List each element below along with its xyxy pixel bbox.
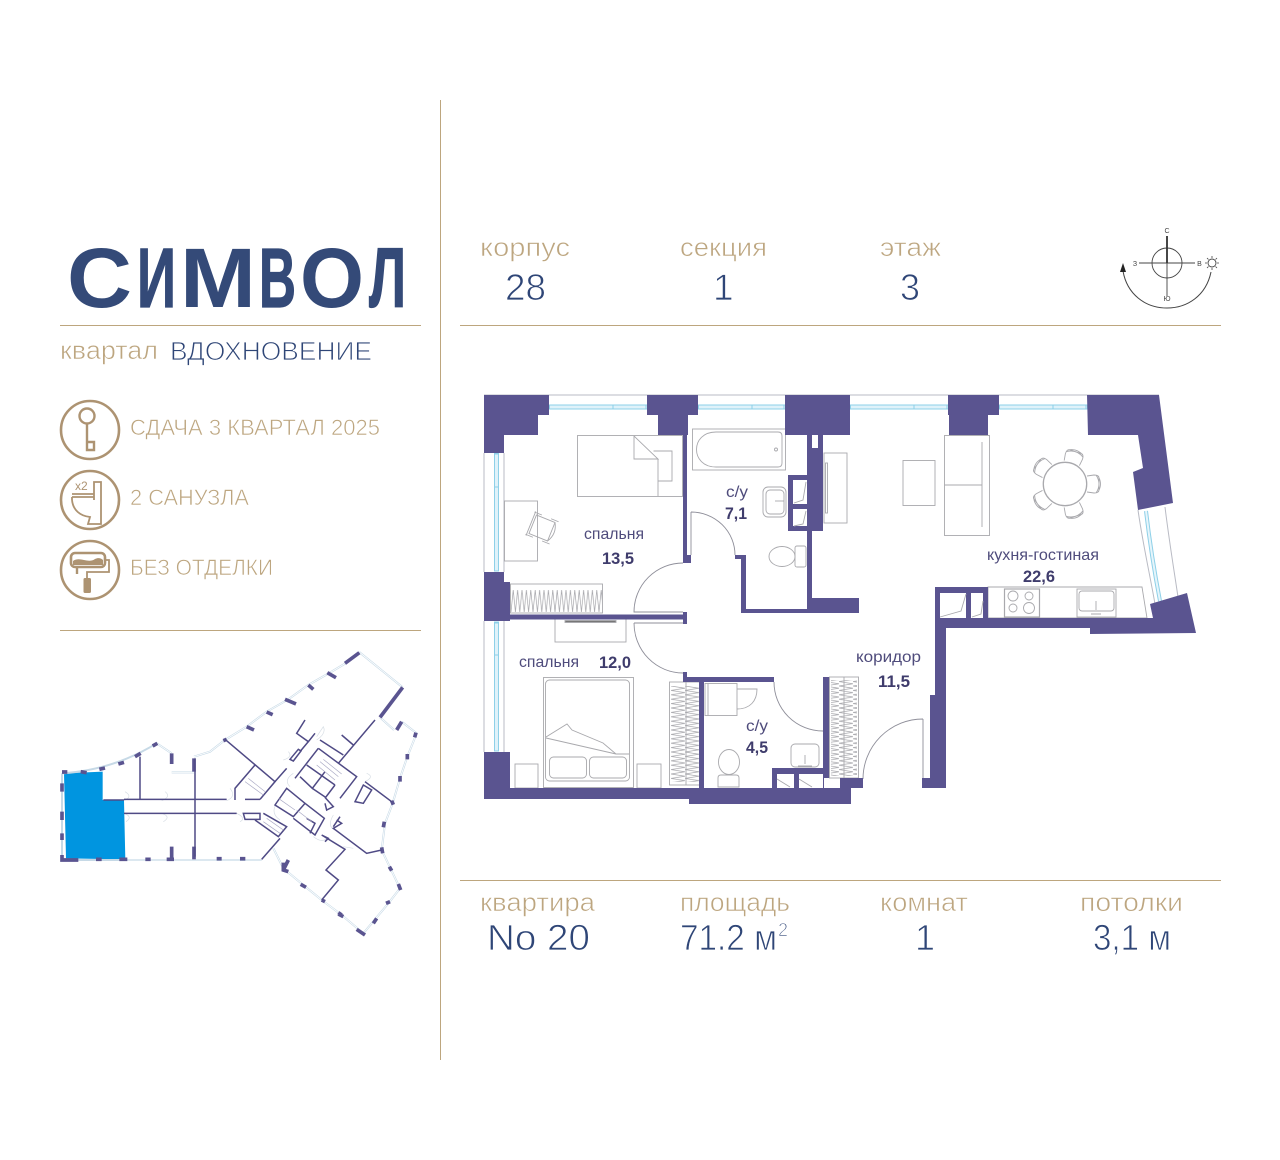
key plan of the floor [62,653,417,935]
floor plan [484,395,1196,804]
room label: bedroom 2: 12,0 [599,654,631,672]
logo: Л [369,231,406,325]
logo: М [180,231,256,325]
outer piers [62,653,416,935]
rooms: 1 [915,917,935,958]
icon: toilet x2 [61,471,119,529]
shaft door marks [777,482,983,787]
feature: finish: БЕЗ ОТДЕЛКИ [130,555,273,580]
icon: compass: З [1133,261,1137,268]
logo: В [259,231,296,325]
district name: квартал [60,335,158,365]
room label: corridor [856,649,921,691]
logo [67,231,406,325]
district name: ВДОХНОВЕНИЕ [170,336,372,366]
floor [880,232,942,308]
ceiling height: потолки [1080,887,1183,917]
furniture: bathroom 2 and hallway [705,677,858,787]
apartment number [480,887,596,958]
logo: О [300,231,364,325]
outer contour and windows [484,395,1178,752]
room label: bathroom 1: с/у [726,484,748,501]
room label: bedroom 1: спальня [584,526,644,543]
room label: bathroom 2: 4,5 [746,739,768,757]
room label: corridor: коридор [856,649,921,666]
section: секция [680,232,767,262]
icon: paint roller [61,541,119,599]
furniture: living room [824,436,1100,536]
icon: compass: В [1197,261,1202,268]
furniture: bedroom 2 [515,619,700,788]
furniture: bathroom 1 [692,429,806,567]
section [680,232,767,308]
header info [480,232,942,308]
rooms: комнат [880,887,968,917]
room label: bedroom 2: спальня [519,654,579,671]
room label: bathroom 1: 7,1 [725,505,747,523]
area: площадь [680,887,790,917]
interior walls [103,757,237,857]
icon: compass: Ю [1163,296,1171,303]
room label: bedroom 1 [584,526,644,568]
feature: bathrooms: 2 САНУЗЛА [130,485,249,510]
room label: bathroom 1 [725,484,748,523]
room label: kitchen-living: кухня-гостиная [987,547,1099,564]
building [480,232,570,308]
floor: 3 [900,267,920,308]
room label: bedroom 1: 13,5 [602,550,634,568]
pale door swings [124,727,370,848]
icon: compass: С [1164,228,1170,235]
area [680,887,790,958]
icon: key [61,401,119,459]
room label: corridor: 11,5 [878,673,910,691]
walls [484,395,1196,804]
building: корпус [480,232,570,262]
highlighted apartment [64,772,125,859]
room label: bedroom 2 [519,654,631,672]
ceiling height: 3,1 м [1093,917,1171,958]
rooms [880,887,968,958]
ceiling height [1080,887,1183,958]
room label: bathroom 2 [746,718,768,757]
section: 1 [713,267,734,308]
icon: toilet x2: x2 [75,479,88,493]
apartment number: квартира [480,887,596,917]
logo: И [137,231,176,325]
building: 28 [505,267,546,308]
room label: bathroom 2: с/у [746,718,768,735]
room label: kitchen-living [987,547,1099,586]
area: 2 [778,920,788,940]
divider lines [60,100,1221,1060]
room label: kitchen-living: 22,6 [1023,568,1055,586]
district name [60,335,372,366]
floor: этаж [880,232,942,262]
doors [634,512,923,779]
apartment number: No 20 [487,917,590,958]
logo: С [67,231,132,325]
footer info [480,887,1183,958]
feature: handover: СДАЧА 3 КВАРТАЛ 2025 [130,415,380,440]
icon: compass [1120,228,1219,308]
furniture: kitchen [988,587,1147,618]
furniture: bedroom 1 [504,436,682,613]
area: 71.2 м [680,917,777,958]
